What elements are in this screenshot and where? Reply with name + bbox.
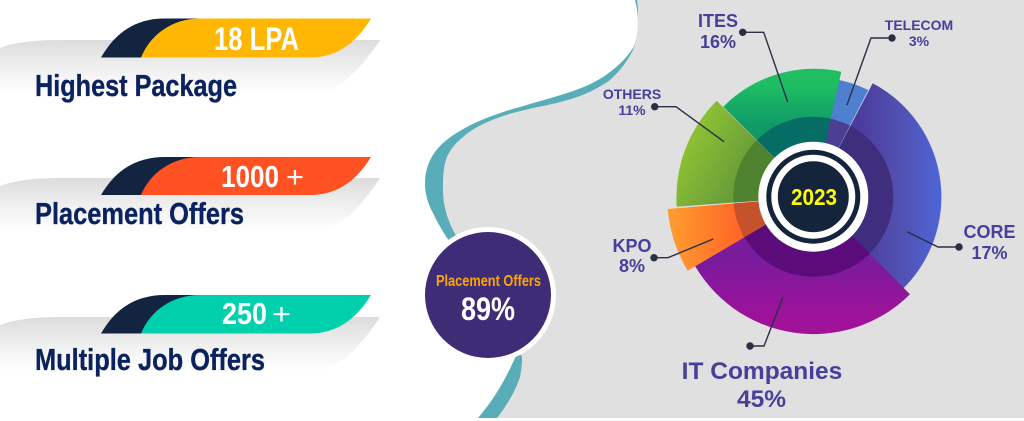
segment: IT Companies [692, 197, 910, 334]
segment: OTHERS [676, 101, 813, 207]
value: 18 LPA [214, 21, 299, 57]
label: IT Companies: 45% [737, 386, 786, 413]
segment: KPO [668, 197, 813, 271]
badge label: Placement Offers [436, 273, 541, 290]
panel: placement offers [0, 157, 380, 232]
grey band [0, 317, 380, 371]
label: TELECOM: 3% [909, 33, 930, 49]
label: CORE: 17% [971, 243, 1008, 263]
leader: TELECOM [847, 35, 895, 105]
grey background panel [443, 0, 1024, 418]
inner dark ring [733, 116, 894, 277]
grey band [0, 178, 380, 232]
value: 1000 [221, 159, 279, 194]
label: CORE [963, 222, 1016, 263]
grey band [0, 40, 380, 94]
label: KPO: 8% [619, 256, 645, 276]
label: TELECOM [885, 17, 953, 49]
label: ITES: 16% [700, 32, 736, 52]
leader: ITES [740, 29, 788, 102]
plus sign: + [286, 161, 304, 194]
heading: Highest Package [35, 68, 237, 103]
orange tab [141, 157, 371, 195]
label: KPO [612, 236, 652, 276]
label: OTHERS: 11% [618, 102, 646, 118]
label: OTHERS: OTHERS [603, 86, 661, 102]
label: ITES [698, 11, 738, 52]
plus sign: + [272, 298, 291, 331]
placement offers badge [420, 227, 556, 363]
label: CORE: CORE [963, 222, 1016, 242]
label: KPO: KPO [612, 236, 652, 256]
heading: Placement Offers [35, 196, 244, 231]
navy tab [101, 18, 205, 58]
panel: highest package [0, 18, 380, 103]
navy tab [101, 295, 205, 334]
heading: Multiple Job Offers [35, 342, 265, 377]
panel: multiple job offers [0, 295, 380, 377]
leader: KPO [651, 239, 713, 261]
label: ITES: ITES [698, 11, 738, 31]
label: TELECOM: TELECOM [885, 17, 953, 33]
segment: ITES [723, 69, 841, 197]
segment: CORE [813, 83, 941, 291]
label: OTHERS [603, 86, 661, 118]
segment: TELECOM [813, 79, 868, 197]
navy tab [101, 157, 205, 195]
teal swoosh [425, 0, 1024, 418]
leader: CORE [907, 232, 962, 250]
yellow tab [141, 18, 371, 58]
centre rings [758, 142, 868, 252]
teal tab [141, 295, 371, 334]
leader: OTHERS [652, 104, 724, 142]
chart: sunburst 2023 [668, 69, 941, 334]
value: 250 [222, 296, 267, 331]
year: 2023 [791, 184, 837, 210]
badge value: 89% [461, 291, 515, 327]
label: IT Companies: IT Companies [682, 358, 842, 385]
leader: IT Companies [747, 297, 783, 349]
label: IT Companies [682, 358, 842, 413]
